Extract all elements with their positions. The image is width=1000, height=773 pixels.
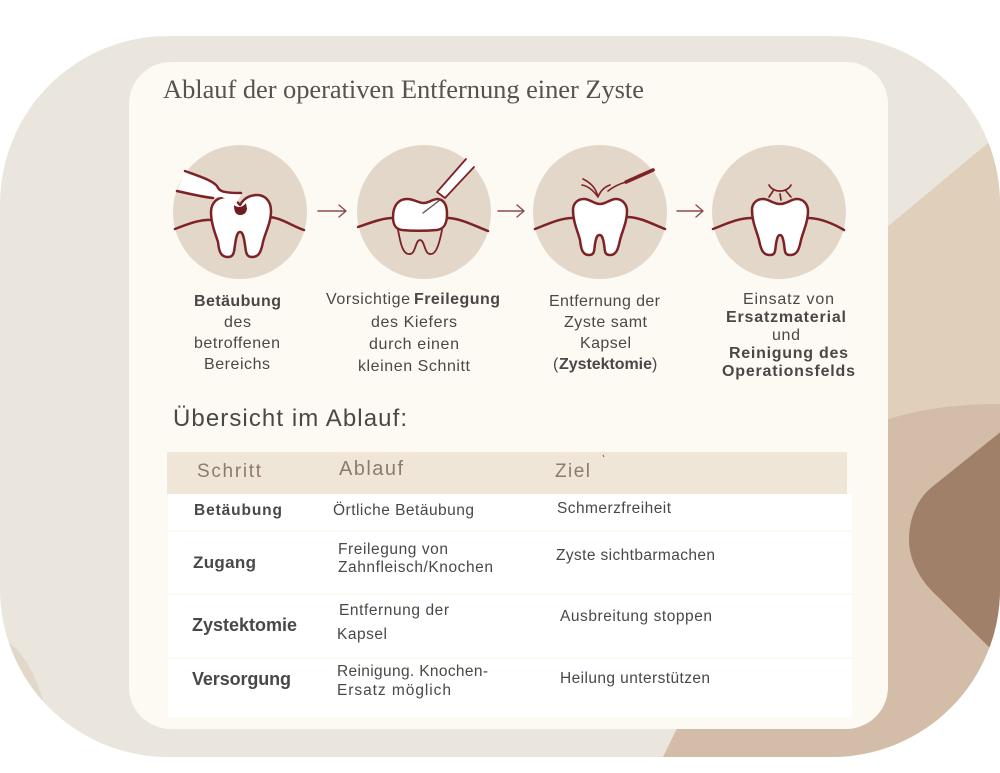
step 4 text bbox=[722, 291, 855, 380]
row: Versorgung bbox=[192, 663, 710, 699]
step 1 text bbox=[194, 293, 281, 373]
step 3 text: Zystektomie bbox=[559, 356, 652, 373]
step 2 text: kleinen Schnitt bbox=[358, 358, 471, 375]
arrow 3 bbox=[677, 205, 703, 217]
panel: card bbox=[129, 62, 888, 729]
step 1 text: Bereichs bbox=[204, 356, 270, 373]
table header: Ziel bbox=[555, 461, 590, 482]
step 3 text: ) bbox=[652, 356, 657, 373]
row: Versorgung: Versorgung bbox=[192, 669, 291, 689]
step 4 text: Ersatzmaterial bbox=[726, 309, 846, 326]
step 3 icon: removing the capsule bbox=[533, 145, 667, 279]
step 2 text: Freilegung bbox=[414, 291, 500, 308]
step 4 text: und bbox=[772, 327, 800, 344]
row: Betäubung: Betäubung bbox=[194, 502, 282, 519]
row: Betäubung: Örtliche Betäubung bbox=[333, 501, 474, 519]
arrow 2 bbox=[498, 205, 524, 217]
row: Zugang bbox=[193, 541, 715, 576]
row: Zystektomie: Zystektomie bbox=[192, 615, 297, 635]
row: Versorgung: Reinigung. Knochen- bbox=[337, 663, 488, 680]
step 1 text: betroffenen bbox=[194, 335, 280, 352]
row: Versorgung: Heilung unterstützen bbox=[560, 670, 710, 687]
step 1 text: Betäubung bbox=[194, 293, 281, 310]
table header: Ablauf bbox=[339, 458, 403, 480]
row: Betäubung: Schmerzfreiheit bbox=[557, 500, 672, 517]
step 1 text: des bbox=[224, 314, 251, 331]
table header bbox=[167, 452, 847, 494]
step 4 icon: cleaned tooth bbox=[712, 145, 846, 279]
step 3 text: Kapsel bbox=[580, 335, 631, 352]
row: Zystektomie: Entfernung der bbox=[339, 602, 449, 619]
row: Zystektomie: Kapsel bbox=[337, 626, 387, 643]
step 3 text: ( bbox=[553, 356, 559, 373]
step 2 text bbox=[326, 291, 500, 375]
step 3 text: Entfernung der bbox=[549, 293, 661, 310]
step 2 icon: exposing the jaw bbox=[357, 145, 491, 279]
step 2 text: durch einen bbox=[369, 336, 459, 353]
step 1 icon: numbing the tooth bbox=[173, 145, 307, 279]
table header: Schritt bbox=[197, 461, 262, 482]
row: Zugang: Zyste sichtbarmachen bbox=[556, 547, 715, 564]
step 2 text: Vorsichtige bbox=[326, 291, 410, 308]
row: Zugang: Freilegung von bbox=[338, 541, 448, 558]
section heading: Übersicht im Ablauf: bbox=[173, 405, 407, 432]
step 3 text: Zyste samt bbox=[564, 314, 648, 331]
row: Zugang: Zahnfleisch/Knochen bbox=[338, 559, 493, 576]
step 3 text bbox=[549, 293, 661, 373]
table rows background bbox=[168, 494, 852, 717]
step 4 text: Reinigung des bbox=[729, 345, 848, 362]
arrow 1 bbox=[318, 205, 346, 217]
row: Betäubung bbox=[194, 500, 672, 519]
step 4 text: Operationsfelds bbox=[722, 363, 855, 380]
row: Zugang: Zugang bbox=[193, 553, 256, 572]
row: Versorgung: Ersatz möglich bbox=[337, 682, 451, 699]
row: Zystektomie bbox=[192, 602, 712, 643]
table bbox=[167, 452, 852, 717]
row: Zystektomie: Ausbreitung stoppen bbox=[560, 608, 712, 625]
step 4 text: Einsatz von bbox=[743, 291, 834, 308]
step 2 text: des Kiefers bbox=[371, 314, 457, 331]
title: Ablauf der operativen Entfernung einer Zyste bbox=[163, 74, 644, 104]
